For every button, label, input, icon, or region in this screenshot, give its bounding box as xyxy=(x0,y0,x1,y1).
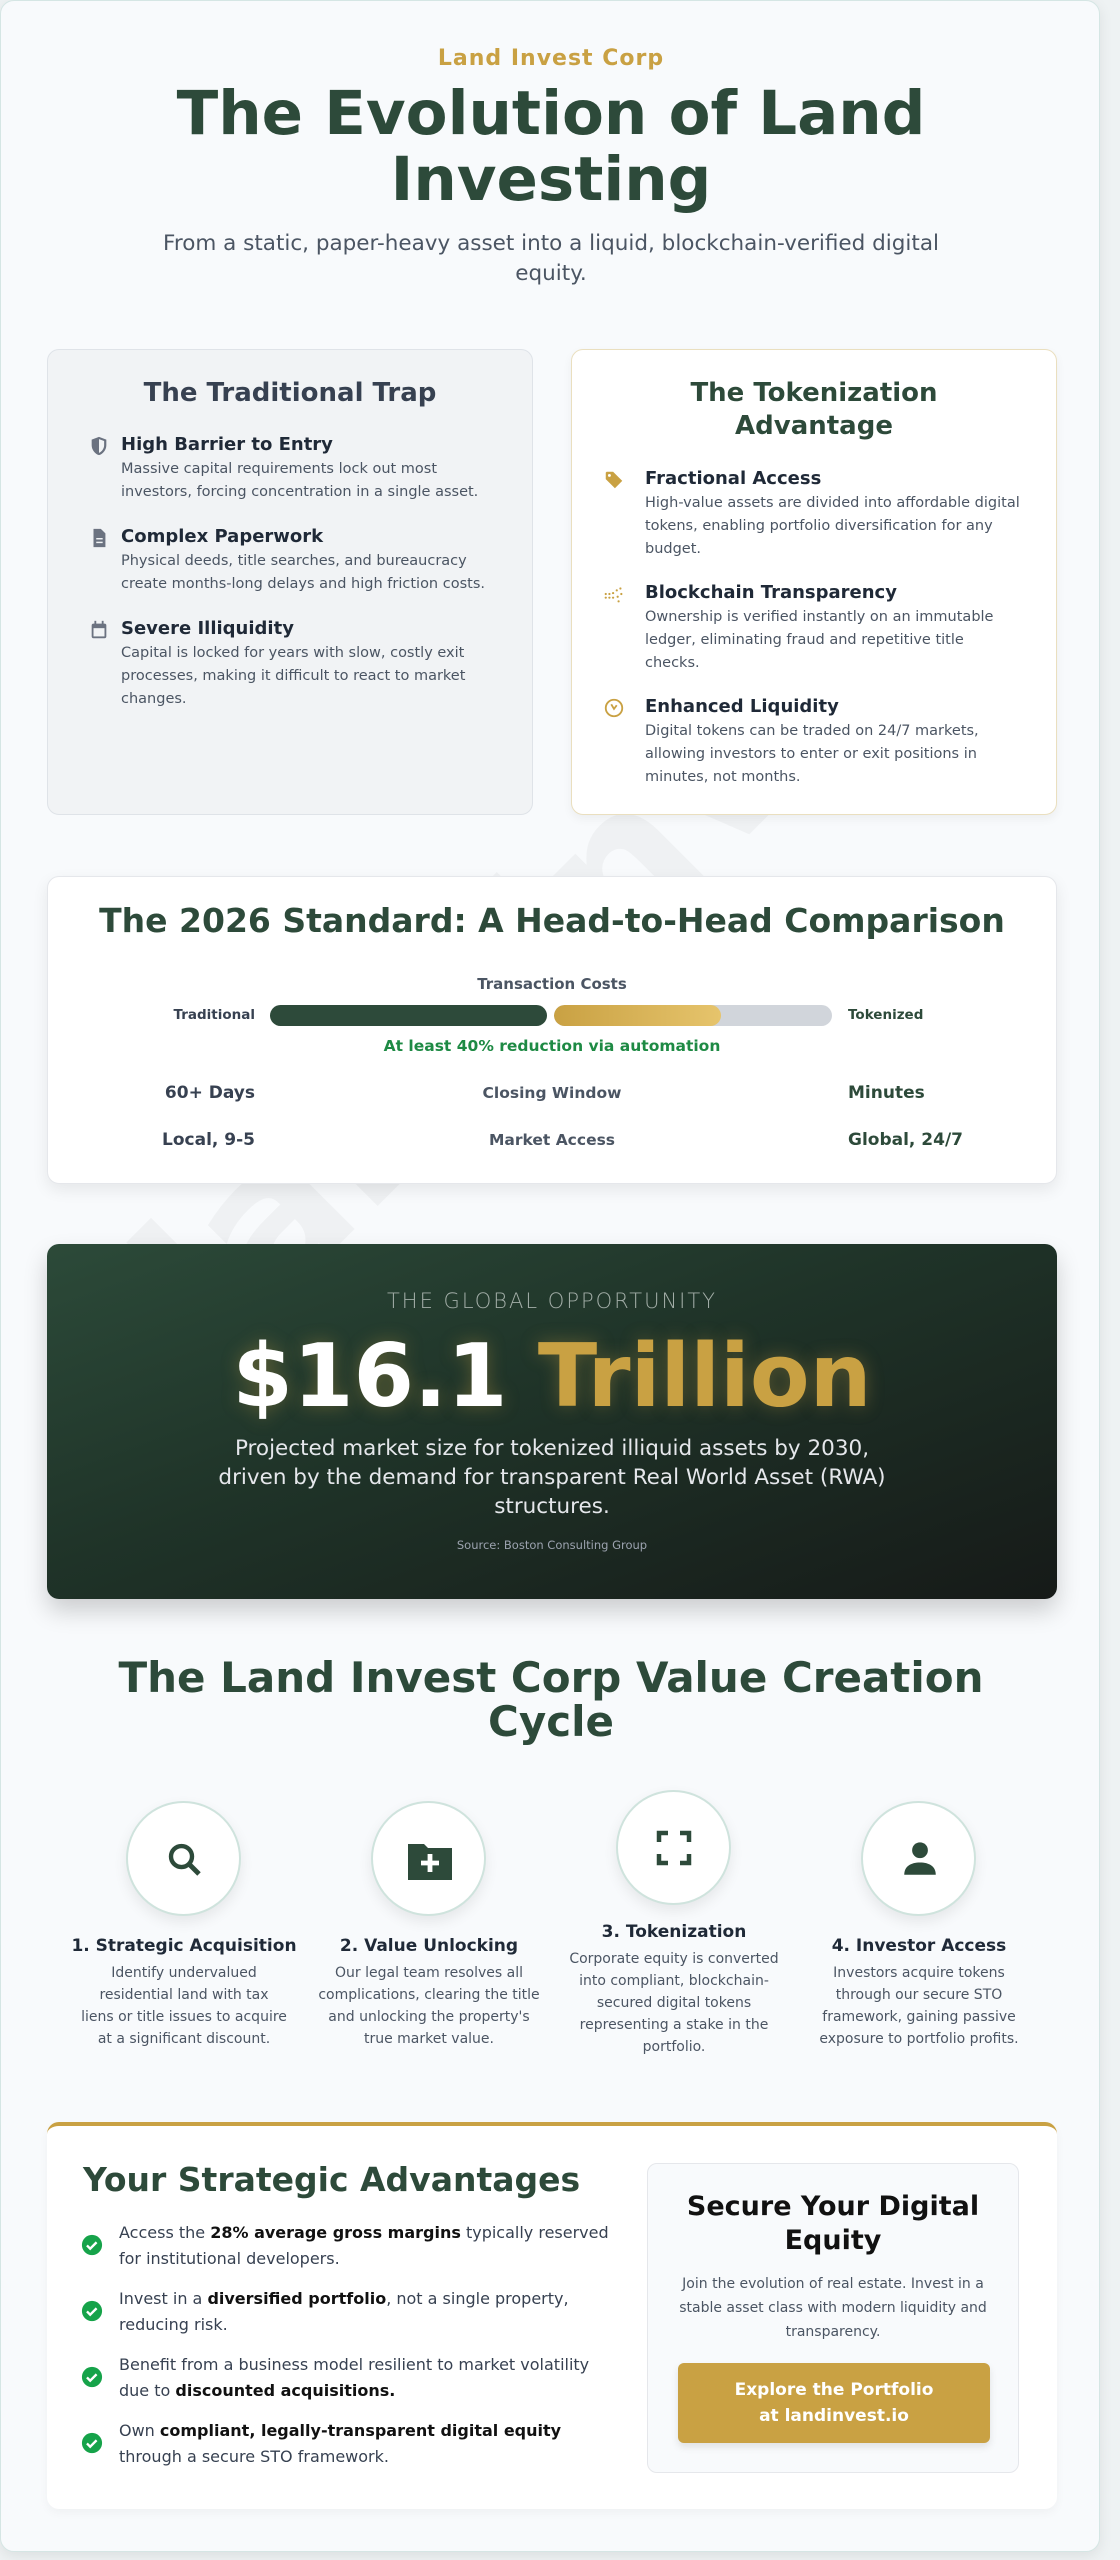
bar chart: transaction costs xyxy=(174,975,923,1055)
icon: tag xyxy=(606,472,622,488)
icon: calendar xyxy=(92,620,106,638)
step 1: 1. Strategic Acquisition xyxy=(71,1936,297,1956)
panel heading: tokenization: Advantage xyxy=(735,411,893,441)
step 3: Corporate equity is converted into compliant, blockchain-secured digital tokens representing a stake in the portfolio. xyxy=(569,1951,779,2055)
item: liquidity: Digital tokens can be traded on 24/7 markets, allowing investors to enter or exit positions in minutes, not months. xyxy=(645,723,979,785)
step 3 xyxy=(569,1790,779,2055)
row: market access: Local, 9-5 xyxy=(162,1130,255,1150)
watermark: landinvest xyxy=(91,396,1091,1396)
item: blockchain: Blockchain Transparency xyxy=(645,582,897,603)
step 2 xyxy=(318,1801,540,2047)
cycle heading: Cycle xyxy=(488,1697,614,1746)
row: closing window: Minutes xyxy=(848,1083,925,1103)
advantage 4: Own compliant, legally-transparent digital equity through a secure STO framework. xyxy=(119,2421,561,2466)
row: market access: Global, 24/7 xyxy=(848,1130,963,1150)
big number: $16.1 Trillion xyxy=(232,1325,872,1427)
bar chart: transaction costs: Traditional xyxy=(174,1007,255,1023)
advantages heading: Your Strategic Advantages xyxy=(83,2160,580,2199)
item: high barrier: High Barrier to Entry xyxy=(121,434,333,455)
item: liquidity: Enhanced Liquidity xyxy=(645,696,839,717)
item: fractional xyxy=(606,468,1020,557)
step 4: 4. Investor Access xyxy=(832,1936,1006,1956)
panel heading: traditional: The Traditional Trap xyxy=(144,378,436,408)
item: fractional: Fractional Access xyxy=(645,468,821,489)
row: market access: Market Access xyxy=(489,1131,615,1149)
CTA heading: Secure Your Digital xyxy=(687,2191,979,2222)
advantage 1: Access the 28% average gross margins typically reserved for institutional developers. xyxy=(119,2223,609,2268)
CTA button: Explore the Portfolio xyxy=(735,2380,933,2400)
item: paperwork: Physical deeds, title searches, and bureaucracy create months-long delays and high friction costs. xyxy=(121,553,485,592)
item: illiquidity: Severe Illiquidity xyxy=(121,618,294,639)
row: closing window xyxy=(165,1083,925,1103)
comparison heading: The 2026 Standard: A Head-to-Head Comparison xyxy=(99,901,1005,940)
icon: dots xyxy=(604,587,622,602)
kicker: THE GLOBAL OPPORTUNITY xyxy=(387,1289,717,1313)
CTA heading: Equity xyxy=(785,2225,881,2256)
panel: tokenization advantage xyxy=(571,349,1057,815)
advantage 3: Benefit from a business model resilient to market volatility due to discounted acquisitions. xyxy=(119,2355,589,2400)
step 1: Identify undervalued residential land with tax liens or title issues to acquire at a significant discount. xyxy=(81,1965,287,2047)
CTA button: at landinvest.io xyxy=(759,2406,909,2426)
panel: strategic advantages xyxy=(47,2122,1057,2509)
CTA button xyxy=(678,2363,990,2443)
icon: gauge xyxy=(604,698,624,718)
item: high barrier: Massive capital requirements lock out most investors, forcing concentration in a single asset. xyxy=(121,461,478,500)
bar chart: transaction costs: At least 40% reduction via automation xyxy=(384,1037,720,1055)
source: Source: Boston Consulting Group xyxy=(457,1538,647,1552)
panel heading: tokenization: The Tokenization xyxy=(690,378,938,408)
bar chart: transaction costs: Transaction Costs xyxy=(477,975,627,993)
icon: folder plus xyxy=(371,1801,486,1916)
step 3: 3. Tokenization xyxy=(602,1922,746,1942)
row: market access xyxy=(162,1130,963,1150)
subtitle: From a static, paper-heavy asset into a liquid, blockchain-verified digital equity. xyxy=(163,231,939,286)
step 4 xyxy=(819,1801,1019,2047)
brand label: Land Invest Corp xyxy=(438,46,664,71)
title xyxy=(176,78,925,215)
icon: document xyxy=(94,528,106,548)
item: fractional: High-value assets are divided into affordable digital tokens, enabling portfolio diversification for any budget. xyxy=(645,495,1020,557)
title: The Evolution of Land xyxy=(177,78,925,149)
bar chart: transaction costs: Tokenized xyxy=(848,1007,923,1023)
icon: fullscreen xyxy=(616,1790,731,1905)
step 2: 2. Value Unlocking xyxy=(340,1936,518,1956)
cycle heading xyxy=(118,1653,984,1746)
item: illiquidity xyxy=(92,618,466,707)
CTA text: Join the evolution of real estate. Invest in a stable asset class with modern liquidity and transparency. xyxy=(679,2276,987,2340)
icon: search xyxy=(126,1801,241,1916)
item: liquidity xyxy=(604,696,979,785)
panel heading: tokenization xyxy=(690,378,938,441)
item: blockchain xyxy=(604,582,993,671)
cycle heading: The Land Invest Corp Value Creation xyxy=(118,1653,984,1702)
CTA heading xyxy=(687,2191,979,2256)
panel: global opportunity xyxy=(47,1244,1057,1599)
panel: comparison xyxy=(47,876,1057,1184)
step 1 xyxy=(71,1801,297,2047)
item: blockchain: Ownership is verified instantly on an immutable ledger, eliminating fraud and repetitive title checks. xyxy=(645,609,993,671)
item: paperwork: Complex Paperwork xyxy=(121,526,323,547)
item: illiquidity: Capital is locked for years with slow, costly exit processes, making it difficult to react to market changes. xyxy=(121,645,465,707)
panel: traditional trap xyxy=(47,349,533,815)
advantage 2: Invest in a diversified portfolio, not a single property, reducing risk. xyxy=(119,2289,569,2334)
item: high barrier xyxy=(92,434,478,500)
title: Investing xyxy=(391,144,711,215)
item: paperwork xyxy=(94,526,485,592)
row: closing window: Closing Window xyxy=(483,1084,621,1102)
row: closing window: 60+ Days xyxy=(165,1083,255,1103)
step 2: Our legal team resolves all complications, clearing the title and unlocking the property's true market value. xyxy=(318,1965,540,2047)
icon: person xyxy=(861,1801,976,1916)
CTA box xyxy=(647,2163,1019,2473)
description: Projected market size for tokenized illiquid assets by 2030, driven by the demand for transparent Real World Asset (RWA) structures. xyxy=(218,1436,886,1519)
icon: shield xyxy=(92,436,106,456)
step 4: Investors acquire tokens through our secure STO framework, gaining passive exposure to portfolio profits. xyxy=(819,1965,1019,2047)
